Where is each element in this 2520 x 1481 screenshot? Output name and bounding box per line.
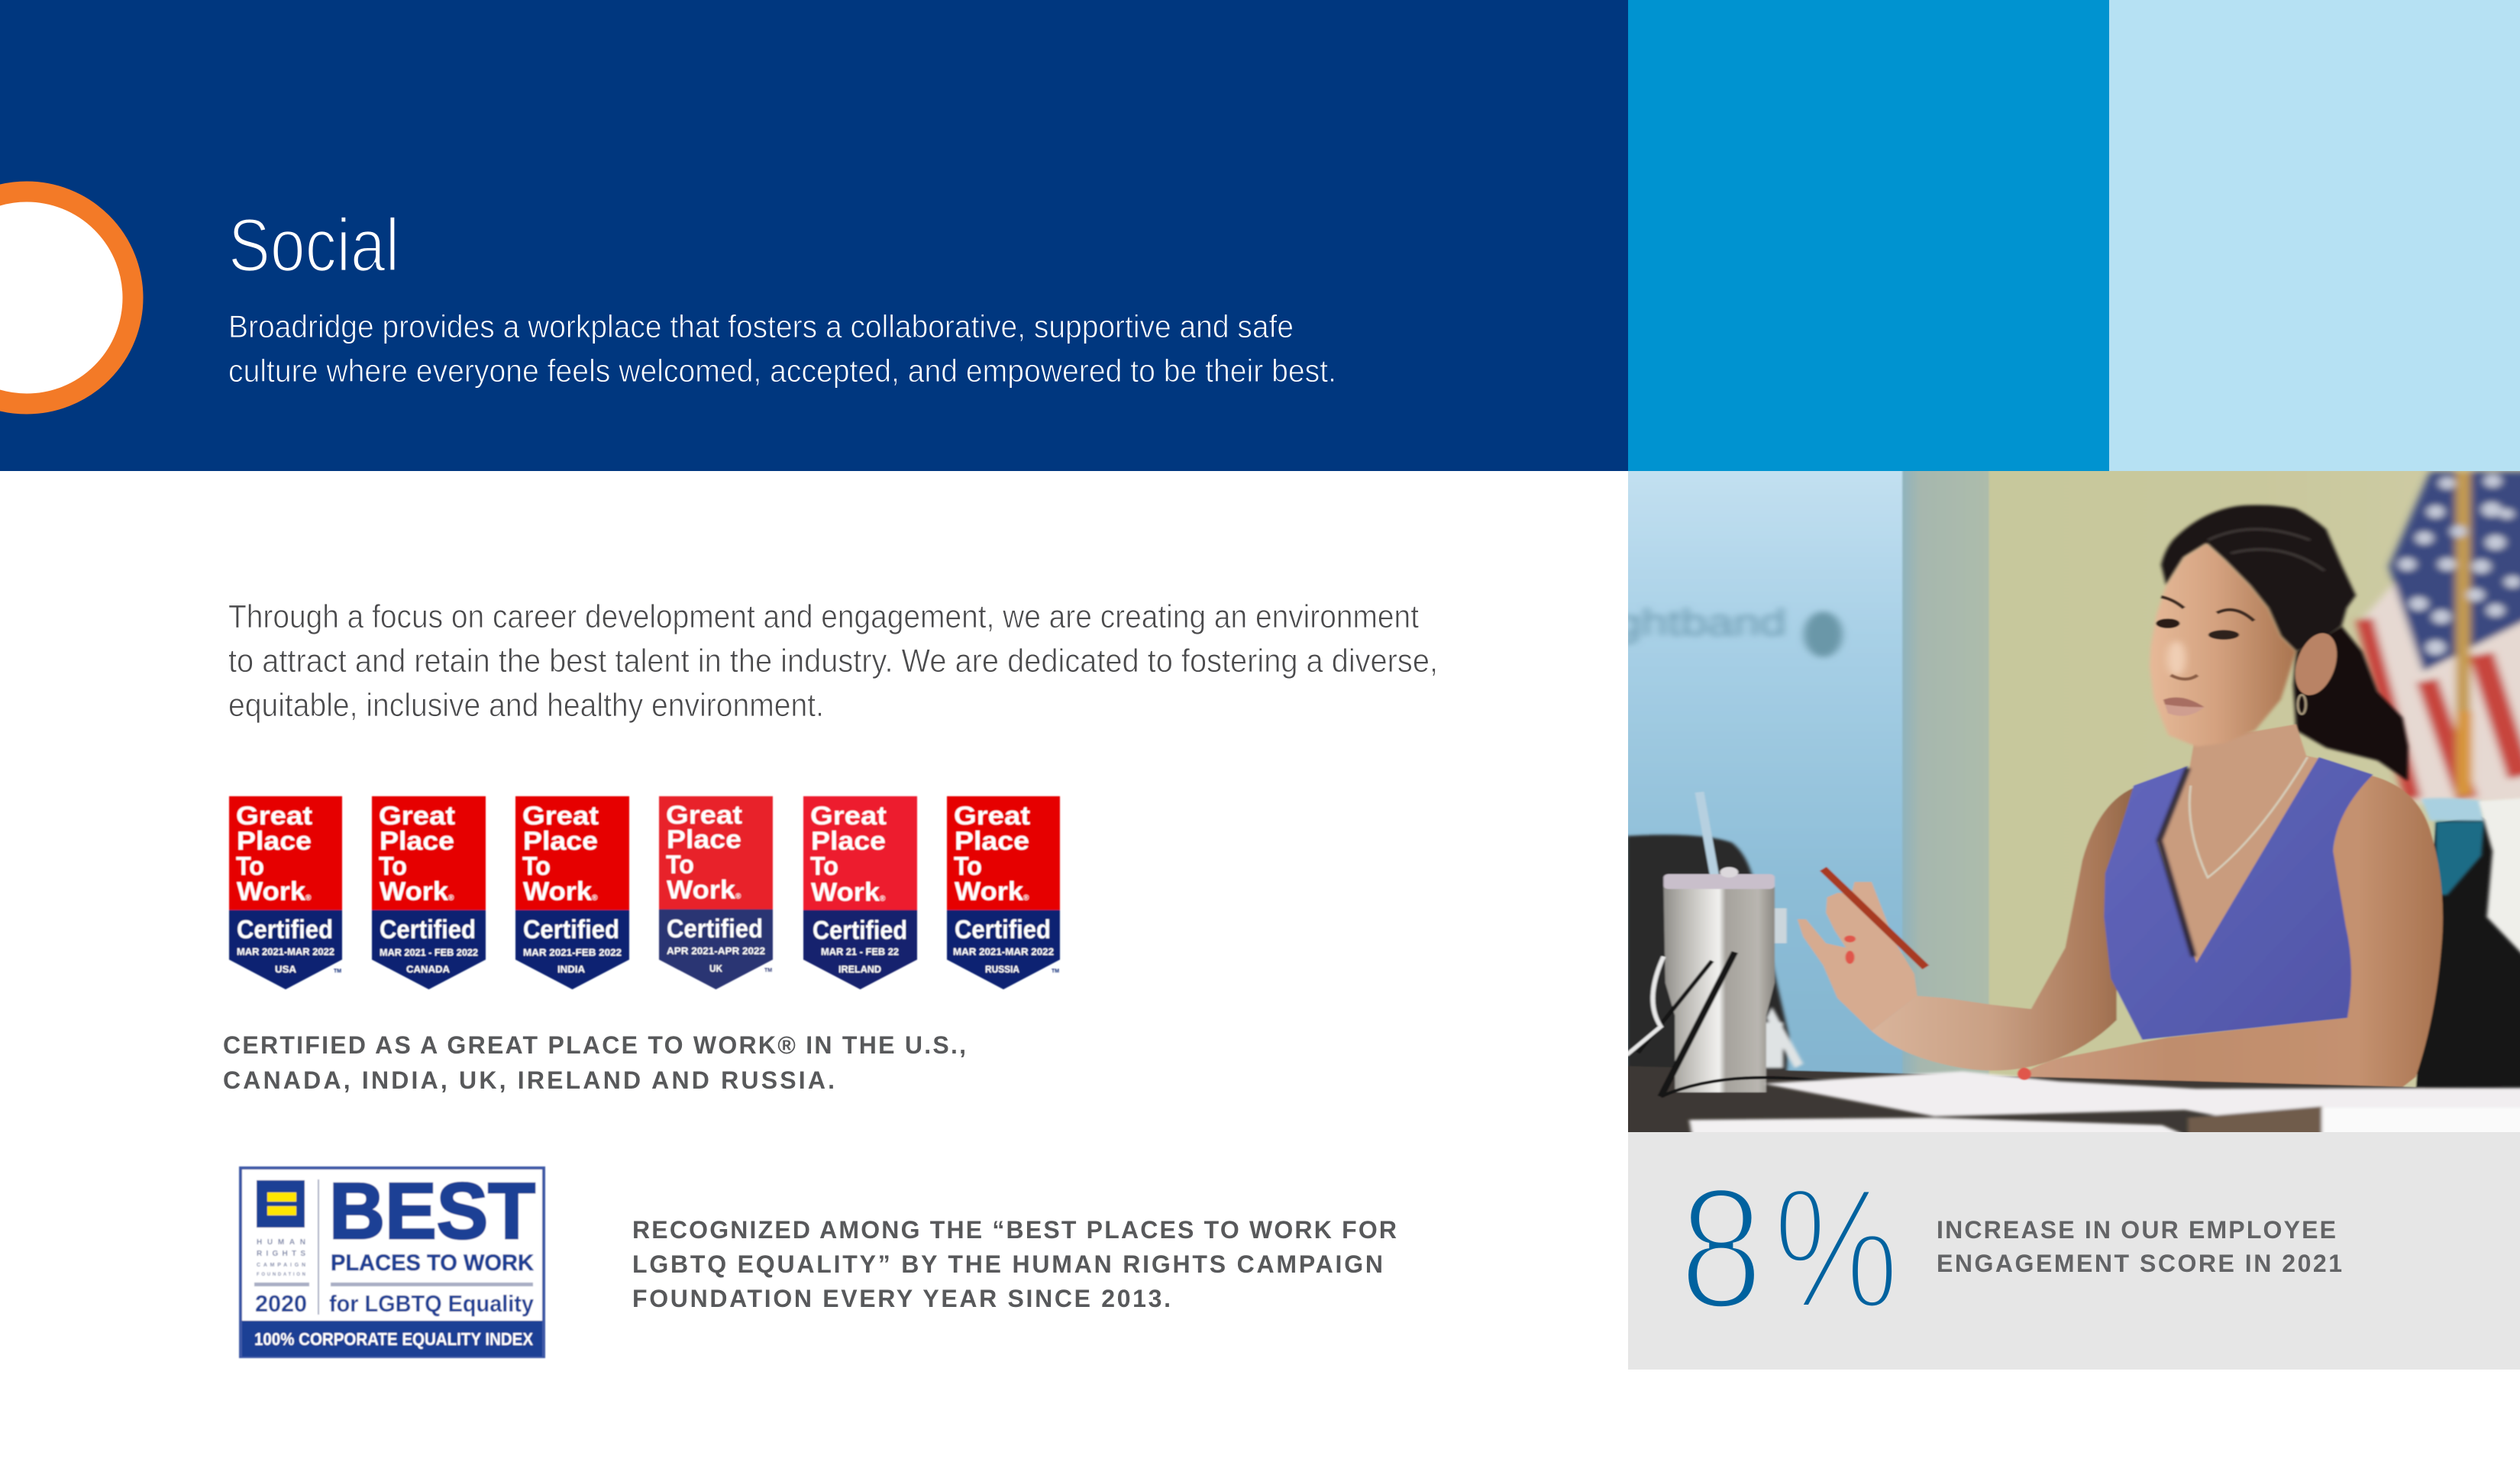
logo: HRC best places to work: 2020 xyxy=(255,1290,307,1317)
badge: Canada: Certified xyxy=(380,915,476,944)
body paragraph: to attract and retain the best talent in the industry. We are dedicated to fostering a diverse, xyxy=(228,643,1438,679)
badge: Russia: Work xyxy=(955,877,1023,906)
header intro text: culture where everyone feels welcomed, accepted, and empowered to be their best. xyxy=(228,353,1336,389)
badge: India: MAR 2021-FEB 2022 xyxy=(523,947,622,958)
badge: Ireland: Certified xyxy=(813,916,907,945)
badge: India: INDIA xyxy=(557,963,586,975)
panel: mid blue block xyxy=(1628,0,2109,471)
face xyxy=(2150,544,2296,747)
foundation name: HUMAN xyxy=(257,1238,305,1247)
badge: Ireland: IRELAND xyxy=(838,963,881,975)
badge: Russia: RUSSIA xyxy=(985,963,1020,975)
tumbler xyxy=(1664,867,1775,1092)
stat: 8% xyxy=(1679,1151,1899,1344)
badge: UK: APR 2021-APR 2022 xyxy=(667,945,765,957)
left chair xyxy=(1627,834,1789,1079)
right chair xyxy=(2415,798,2520,1090)
badge: Canada xyxy=(372,796,486,989)
badge: India: ® xyxy=(592,894,598,902)
badge: India: Great xyxy=(522,802,599,831)
dress neckline shadow xyxy=(2160,768,2193,957)
badge: India: Place xyxy=(523,827,598,856)
viewer-right arm and hand xyxy=(2021,775,2443,1088)
tripod and white base xyxy=(1763,1007,1803,1068)
HRC recognition caption: RECOGNIZED AMONG THE “BEST PLACES TO WORK FOR xyxy=(632,1216,1397,1244)
badge: Canada: To xyxy=(379,852,407,881)
HRC recognition caption xyxy=(632,1216,1397,1312)
fingernails xyxy=(1844,935,2031,1080)
logo: HRC best places to work: for LGBTQ Equality xyxy=(329,1290,535,1317)
title: Social xyxy=(228,203,399,287)
papers xyxy=(1689,1071,2520,1136)
certification caption xyxy=(223,1031,966,1094)
badge: India: To xyxy=(522,852,551,881)
foundation name: FOUNDATION xyxy=(257,1273,305,1277)
straw xyxy=(1700,792,1715,878)
body paragraph: equitable, inclusive and healthy environment. xyxy=(228,687,824,724)
badge: USA: Place xyxy=(237,827,312,856)
logo: HRC best places to work: 100% CORPORATE EQUALITY INDEX xyxy=(254,1329,534,1349)
cables xyxy=(1627,952,1846,1097)
badge: UK: TM xyxy=(764,968,772,973)
badge: USA xyxy=(229,796,342,989)
badge: USA: To xyxy=(236,852,264,881)
HRC recognition caption: FOUNDATION EVERY YEAR SINCE 2013. xyxy=(632,1285,1171,1312)
icon: orange ring xyxy=(0,192,133,404)
pen xyxy=(1823,869,1926,967)
foundation name: RIGHTS xyxy=(257,1250,305,1258)
badge: UK: ® xyxy=(735,892,741,901)
badge: UK: Certified xyxy=(667,915,763,944)
qr sticker xyxy=(1772,908,1787,944)
stat description xyxy=(1937,1216,2342,1277)
badge: India: Certified xyxy=(523,915,619,944)
badge: Ireland: To xyxy=(810,852,838,881)
badge: Ireland: Great xyxy=(810,802,887,831)
header intro text: Broadridge provides a workplace that fosters a collaborative, supportive and safe xyxy=(228,308,1294,344)
equality mark xyxy=(257,1180,305,1228)
badge: USA: Great xyxy=(236,802,312,831)
badge: USA: Certified xyxy=(237,915,333,944)
badge: USA: Work xyxy=(237,877,305,906)
badge: Ireland: Work xyxy=(811,878,880,907)
badge: Canada: CANADA xyxy=(406,963,451,975)
stat description: ENGAGEMENT SCORE IN 2021 xyxy=(1937,1250,2342,1277)
badge: Canada: Place xyxy=(380,827,454,856)
certification caption: CANADA, INDIA, UK, IRELAND AND RUSSIA. xyxy=(223,1066,835,1094)
flag xyxy=(2359,472,2520,803)
photo: woman at conference table xyxy=(1615,461,2520,1163)
badge: USA: ® xyxy=(305,894,312,902)
badge: Russia xyxy=(947,796,1060,989)
badge: Russia: TM xyxy=(1052,969,1059,974)
facial features xyxy=(2156,597,2254,716)
badge: UK: UK xyxy=(709,963,723,974)
badge: UK: Work xyxy=(667,876,735,905)
earring xyxy=(2298,695,2305,714)
panel: engagement stat xyxy=(1628,1132,2520,1370)
certification caption: CERTIFIED AS A GREAT PLACE TO WORK® IN THE U.S., xyxy=(223,1031,966,1059)
badge: India: Work xyxy=(523,877,592,906)
badge: USA: TM xyxy=(334,969,341,974)
necklace xyxy=(2189,757,2308,878)
body paragraph: Through a focus on career development and engagement, we are creating an environment xyxy=(228,599,1419,635)
stat description: INCREASE IN OUR EMPLOYEE xyxy=(1937,1216,2336,1244)
stat: 8%: 8 xyxy=(1679,1151,1763,1344)
foundation name xyxy=(257,1238,305,1277)
badge: Russia: Great xyxy=(954,802,1030,831)
wall logo text xyxy=(1615,602,1843,657)
header intro text xyxy=(228,308,1336,389)
badge: Russia: MAR 2021-MAR 2022 xyxy=(953,946,1054,957)
hair top xyxy=(2161,505,2356,651)
badge: Ireland: MAR 21 - FEB 22 xyxy=(821,946,899,957)
foundation name: CAMPAIGN xyxy=(257,1263,305,1268)
panel: navy header xyxy=(0,0,1628,471)
badge: Canada: MAR 2021 - FEB 2022 xyxy=(380,947,478,958)
stat: 8%: % xyxy=(1773,1151,1899,1344)
logo: HRC best places to work: PLACES TO WORK xyxy=(331,1250,534,1276)
panel: light blue block xyxy=(2109,0,2520,471)
badge: UK: Great xyxy=(666,801,742,830)
body paragraph xyxy=(228,599,1438,724)
photo background walls xyxy=(1628,471,2520,1088)
hair highlights xyxy=(2208,529,2325,571)
ponytail and hair back xyxy=(2293,626,2409,781)
badge: Russia: Place xyxy=(955,827,1029,856)
badge: USA: MAR 2021-MAR 2022 xyxy=(237,946,334,957)
badge: Canada: ® xyxy=(448,894,454,902)
badge: USA: USA xyxy=(275,963,297,975)
badge: UK: Place xyxy=(667,825,741,854)
neck and chest xyxy=(2160,724,2319,965)
badge: Ireland: ® xyxy=(880,895,886,903)
blue dress xyxy=(2104,757,2373,1040)
badge: Russia: Certified xyxy=(955,915,1051,944)
badge: UK xyxy=(659,796,773,989)
badge: Russia: ® xyxy=(1023,894,1029,902)
HRC recognition caption: LGBTQ EQUALITY” BY THE HUMAN RIGHTS CAMPAIGN xyxy=(632,1250,1383,1278)
wall logo text: ghtband xyxy=(1615,602,1786,644)
badge: Ireland: Place xyxy=(811,827,886,856)
badge: Ireland xyxy=(803,796,917,989)
badge: Canada: Work xyxy=(380,877,448,906)
hand holding pen xyxy=(1798,882,1917,1031)
badge: Russia: To xyxy=(954,852,982,881)
logo: HRC best places to work: BEST xyxy=(329,1167,535,1256)
viewer-left arm xyxy=(1872,786,2140,1070)
badge: Canada: Great xyxy=(379,802,455,831)
desk surface xyxy=(1628,1066,2460,1132)
badge: UK: To xyxy=(666,850,694,879)
badge: India xyxy=(515,796,629,989)
ear xyxy=(2294,632,2338,696)
logo: HRC best places to work xyxy=(241,1167,544,1357)
badges row xyxy=(229,796,1060,989)
